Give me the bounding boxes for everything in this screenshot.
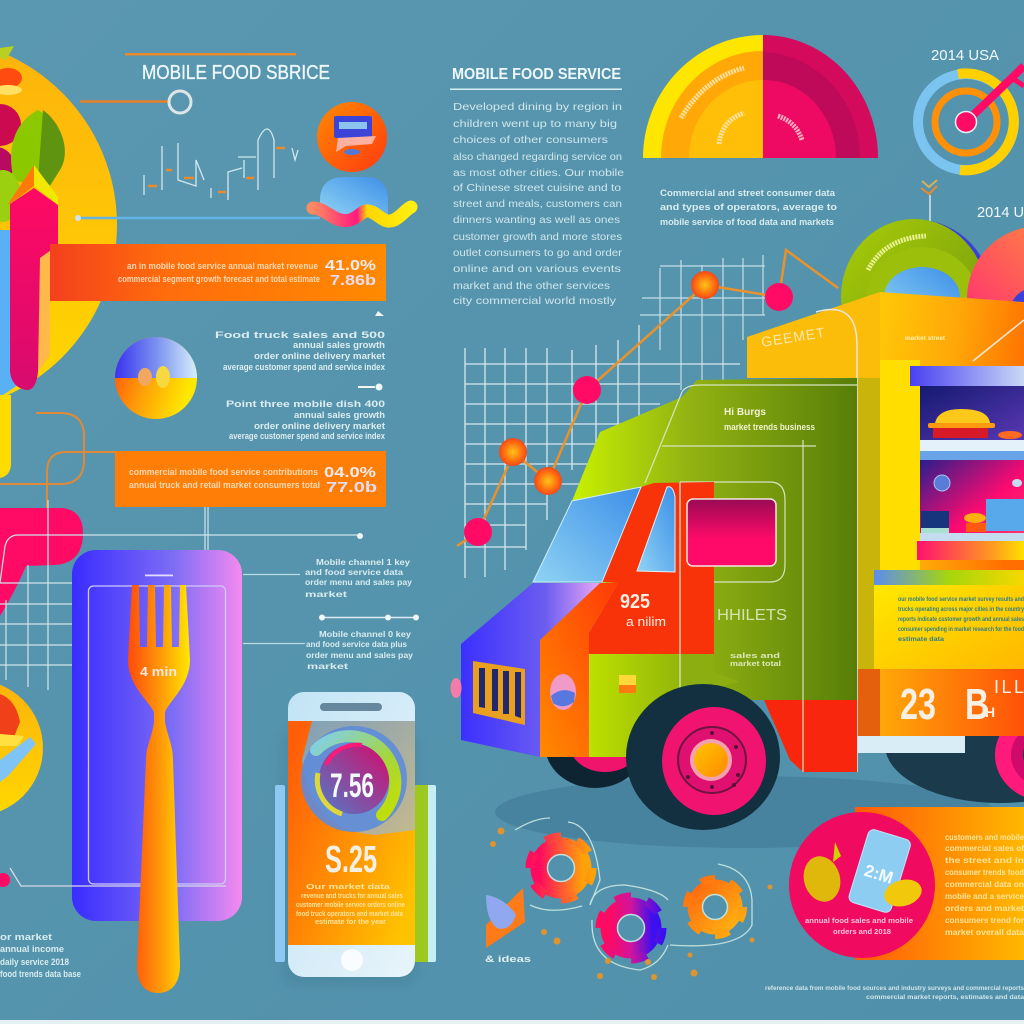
- pointer: [973, 320, 1024, 361]
- icon: gear three: [670, 864, 752, 946]
- text block: centre paragraph: Developed dining by region in: [453, 101, 622, 113]
- connector loops: [0, 413, 115, 510]
- icon: lemon right: [881, 876, 925, 910]
- side marker: [619, 675, 636, 693]
- text block: centre paragraph: choices of other consumers: [453, 134, 608, 146]
- door window: [637, 487, 675, 572]
- ground shadow: [495, 776, 995, 848]
- bottom page edge: [0, 1020, 1024, 1024]
- icon: fork: 4 min: [140, 664, 177, 679]
- connector line to pink dot: [0, 868, 226, 887]
- left grid lines: [0, 500, 360, 690]
- panel text: orders and market: [945, 904, 1024, 913]
- orange band: 23: [900, 680, 936, 729]
- white chassis strip: [857, 736, 965, 753]
- icon: lemon left: [799, 842, 845, 906]
- label: 2014 usa right: 2014 U: [977, 204, 1024, 221]
- text block: bottom footer: commercial market reports, estimates and data: [866, 994, 1024, 1001]
- text block: chart caption: mobile service of food data and markets: [660, 217, 834, 228]
- panel: phone card: S.25: [325, 839, 377, 881]
- text block: chart caption: [660, 188, 837, 228]
- text block: centre paragraph: outlet consumers to go and order: [453, 247, 623, 259]
- text block: fork note two: market: [307, 661, 348, 671]
- icon: speech bubble badge: [317, 102, 387, 172]
- food pieces: [0, 46, 65, 222]
- gauge: 7.56: [330, 767, 374, 805]
- text block: bottom left: or market: [0, 932, 52, 942]
- text block: centre paragraph: dinners wanting as well as ones: [453, 214, 620, 226]
- yellow panel text: estimate data: [898, 636, 944, 643]
- connector dot: [357, 533, 363, 539]
- cargo body: [880, 292, 1024, 669]
- orange band: ILL: [994, 677, 1024, 697]
- text block: centre paragraph: as most other cities. Our mobile: [453, 167, 624, 179]
- panel: phone card: revenue and trucks for annual sales: [301, 891, 403, 900]
- small label: market street: [905, 336, 945, 342]
- label: 2014 usa top: 2014 USA: [931, 47, 999, 64]
- door labels: Hi Burgs: [724, 407, 766, 418]
- panel: phone card: food truck operators and market data: [296, 909, 404, 918]
- panel: banner two: [115, 451, 386, 507]
- house column: [8, 165, 58, 390]
- red door: [589, 482, 714, 654]
- roof line label: GEEMET: [760, 324, 826, 350]
- pink window: [687, 499, 776, 566]
- food circle lower left: [0, 680, 43, 816]
- circle caption: [805, 918, 913, 936]
- orange band: [858, 669, 1024, 736]
- panel: phone card: estimate for the year: [315, 917, 386, 926]
- panel: banner two: 77.0b: [326, 479, 377, 496]
- panel: banner one: 41.0%: [325, 257, 376, 274]
- text block: fork note one: Mobile channel 1 key: [316, 557, 410, 567]
- icon: gear two: [590, 885, 668, 970]
- text block: fork note two: and food service data plus: [306, 639, 407, 649]
- orange band: B: [965, 680, 989, 729]
- cab green body: [572, 378, 857, 772]
- callout ring: [80, 91, 191, 113]
- grille: [473, 661, 525, 725]
- semicircle chart: [643, 35, 878, 158]
- yellow lower panel: [0, 395, 11, 478]
- domes on truck: [841, 219, 1024, 380]
- text block: centre paragraph: city commercial world mostly: [453, 295, 617, 307]
- text block: fork note one: and food service data: [305, 567, 403, 577]
- gem label: & ideas: [485, 954, 531, 964]
- target chart: [918, 66, 1024, 170]
- text block: centre paragraph: market and the other services: [453, 280, 610, 292]
- panel: banner one: [50, 244, 386, 301]
- pink blob: [0, 508, 83, 616]
- door vertical: [679, 482, 681, 690]
- upper grid: [640, 255, 765, 390]
- panel: purple fork card: [72, 550, 242, 921]
- panel: left food plate illustration: [0, 38, 117, 478]
- text block: stats one: annual sales growth: [293, 340, 385, 350]
- icon: blue dome and ribbon: [75, 177, 411, 221]
- text block: stats two: average customer spend and service index: [229, 431, 385, 441]
- text block: fork note two: Mobile channel 0 key: [319, 629, 411, 639]
- icon: phone: [848, 828, 912, 914]
- text block: stats two: annual sales growth: [294, 410, 385, 420]
- heading: mobile food service left: MOBILE FOOD SBRICE: [142, 62, 330, 84]
- icon: fork: [128, 585, 190, 993]
- service window: [910, 366, 1024, 560]
- circle caption: annual food sales and mobile: [805, 918, 913, 925]
- arrow marker: [921, 180, 937, 250]
- text block: chart caption: and types of operators, average to: [660, 202, 837, 213]
- purple front: [461, 583, 600, 757]
- cab bottom red: [764, 700, 857, 772]
- icon: gem: [486, 888, 525, 948]
- panel text: [945, 833, 1024, 937]
- panel text: commercial sales of: [945, 844, 1024, 853]
- confetti dots: [490, 828, 772, 980]
- top rule: [125, 53, 296, 56]
- panel: phone card: Our market data: [306, 882, 391, 891]
- orange band: H: [985, 704, 995, 720]
- line chart grid: [465, 325, 740, 578]
- text block: stats one: Food truck sales and 500: [215, 330, 385, 340]
- door labels: a nilim: [626, 614, 666, 629]
- text block: bottom left: daily service 2018: [0, 957, 69, 967]
- text block: centre paragraph: online and on various events: [453, 263, 621, 275]
- text block: centre paragraph: [453, 101, 624, 307]
- line chart trend: [457, 250, 838, 546]
- door outlines: [645, 385, 857, 772]
- panel text: mobile and a service: [945, 892, 1024, 901]
- rear wheel: [885, 687, 1024, 803]
- panel: phone card: [275, 692, 436, 985]
- cargo lines: [816, 309, 857, 772]
- door labels: market total: [730, 661, 781, 668]
- sparkline chart: [144, 129, 298, 200]
- text block: fork note two: order menu and sales pay: [306, 650, 413, 660]
- panel text: market overall data: [945, 928, 1024, 937]
- door labels: 925: [620, 591, 650, 613]
- gauge: [301, 726, 407, 832]
- text block: stats one: order online delivery market: [254, 351, 385, 361]
- text block: bottom left: annual income: [0, 944, 64, 954]
- door labels: HHILETS: [717, 607, 787, 624]
- yellow plate circle: [0, 38, 117, 412]
- panel: phone card: customer mobile service orders online: [296, 900, 405, 909]
- text block: stats two: order online delivery market: [254, 421, 385, 431]
- text block: bottom footer: [765, 985, 1024, 1001]
- text block: stats two: Point three mobile dish 400: [226, 399, 385, 409]
- icon: gradient ball: [115, 337, 197, 419]
- door labels: [620, 407, 815, 668]
- cargo lower yellow panel: [874, 585, 1024, 669]
- door labels: sales and: [730, 653, 780, 660]
- text block: centre paragraph: also changed regarding service on: [453, 151, 622, 163]
- panel: banner two: 04.0%: [324, 464, 376, 481]
- text block: chart caption: Commercial and street consumer data: [660, 188, 836, 199]
- hidden front wheel: [545, 702, 645, 788]
- panel text: commercial data on: [945, 880, 1024, 889]
- text block: bottom left: [0, 932, 81, 979]
- text block: fork note one: order menu and sales pay: [305, 577, 412, 587]
- text block: fork note one: [243, 557, 412, 599]
- lime lower door: [589, 654, 714, 757]
- icon: phone: 2:M: [862, 861, 895, 888]
- panel text: consumers trend for: [945, 916, 1024, 925]
- yellow panel text: [898, 596, 1024, 643]
- window ledge: [874, 570, 1024, 585]
- text block: centre paragraph: of Chinese street cuisine and to: [453, 182, 621, 194]
- door labels: market trends business: [724, 422, 815, 432]
- orange front: [540, 583, 618, 757]
- panel: banner two: annual truck and retail market consumers total: [129, 480, 320, 490]
- text block: fork note one: market: [305, 589, 347, 599]
- panel: orange bottom right: [789, 807, 1024, 960]
- text block: bottom left: food trends data base: [0, 969, 81, 979]
- circle caption: orders and 2018: [833, 929, 891, 936]
- icon: gear one: [515, 818, 600, 910]
- panel: food truck: [450, 292, 1024, 830]
- headlamp: [550, 674, 576, 710]
- heading: mobile food service centre: MOBILE FOOD SERVICE: [452, 66, 621, 83]
- text block: stats one: [215, 311, 385, 372]
- text block: centre paragraph: customer growth and more stores: [453, 231, 622, 243]
- cargo side strip: [857, 378, 880, 669]
- windshield: [533, 487, 641, 582]
- timeline dots: [319, 614, 419, 620]
- text block: stats two: [226, 384, 385, 441]
- panel: banner one: commercial segment growth forecast and total estimate: [118, 274, 320, 284]
- text block: centre paragraph: street and meals, customers can: [453, 198, 622, 210]
- text block: fork note two: [243, 629, 413, 671]
- blue side panel: [0, 230, 18, 397]
- cargo top panel: [747, 292, 880, 378]
- front wheel: [626, 684, 780, 830]
- text block: stats one: average customer spend and service index: [223, 362, 385, 372]
- panel: banner one: 7.86b: [330, 272, 376, 289]
- text block: centre paragraph: children went up to many big: [453, 118, 617, 130]
- side lamp: [450, 678, 462, 698]
- panel: banner one: an in mobile food service annual market revenue: [127, 261, 318, 271]
- panel text: the street and in: [945, 856, 1024, 865]
- panel: banner two: commercial mobile food service contributions: [129, 467, 318, 477]
